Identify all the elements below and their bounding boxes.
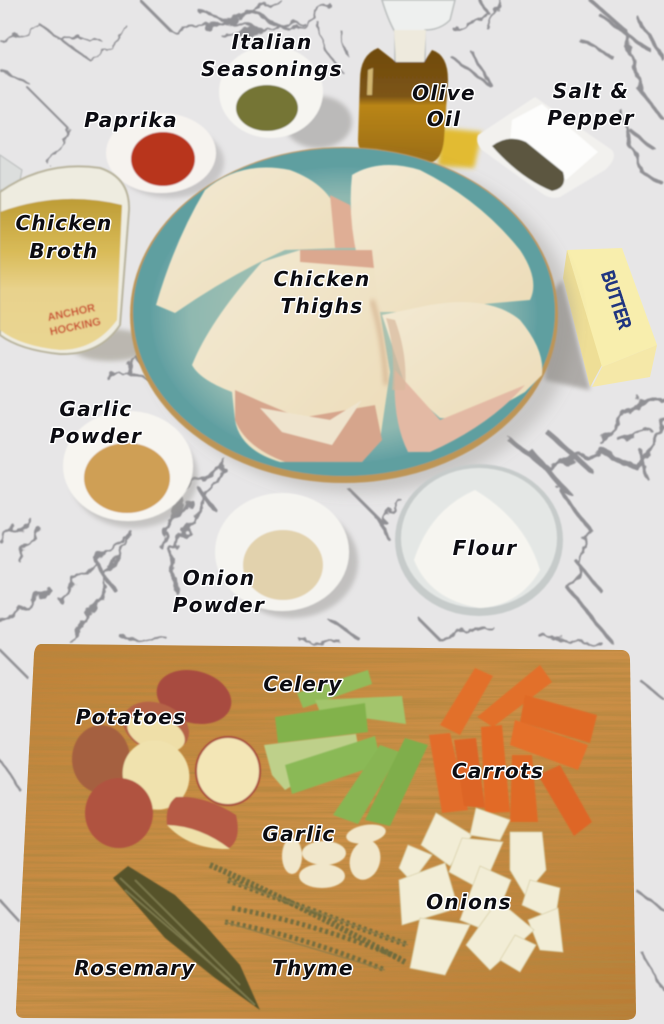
- garlic cloves: [282, 822, 387, 888]
- label: Chicken Thighs: [273, 267, 371, 318]
- measuring cup: chicken broth: [0, 155, 150, 361]
- label: Olive Oil: [412, 81, 476, 131]
- label: Celery: Celery: [263, 672, 343, 696]
- label: Italian Seasonings: Italian: [231, 30, 313, 54]
- bowl: onion powder: [215, 493, 358, 618]
- label: Onion Powder: [173, 566, 265, 617]
- label: Chicken Thighs: Chicken: [273, 267, 371, 291]
- label: Chicken Broth: Broth: [29, 239, 99, 263]
- label: Italian Seasonings: Seasonings: [201, 57, 343, 81]
- thyme: [210, 865, 408, 970]
- plate: [130, 147, 574, 493]
- bottle: olive oil: [358, 0, 482, 168]
- bowl: paprika: [106, 113, 224, 198]
- label: Salt and Pepper: [547, 79, 635, 130]
- label: Italian Seasonings: [201, 30, 343, 81]
- label: Onion Powder: Onion: [183, 566, 255, 590]
- label: Garlic Powder: [50, 397, 142, 448]
- celery: [264, 670, 428, 826]
- wooden cutting board: [16, 644, 636, 1020]
- label: Salt and Pepper: Salt &: [553, 79, 629, 103]
- potatoes: [72, 662, 260, 849]
- label: Garlic: Garlic: [262, 822, 336, 846]
- glass bowl: flour: [395, 464, 563, 616]
- measuring cup: chicken broth: HOCKING: [49, 316, 102, 338]
- label: Carrots: Carrots: [452, 759, 544, 783]
- label: Chicken Broth: Chicken: [15, 211, 113, 235]
- butter: [545, 248, 657, 390]
- label: Chicken Thighs: Thighs: [280, 294, 364, 318]
- label: Rosemary: Rosemary: [74, 956, 196, 980]
- label: Potatoes: Potatoes: [76, 705, 186, 729]
- label: Garlic Powder: Powder: [50, 424, 142, 448]
- label: Chicken Broth: [15, 211, 113, 263]
- chicken thighs: [156, 165, 542, 462]
- label: Onion Powder: Powder: [173, 593, 265, 617]
- bowl: Italian seasonings: [219, 46, 352, 148]
- label: Flour: Flour: [453, 536, 517, 560]
- label: Paprika: Paprika: [84, 108, 178, 132]
- onions: [399, 808, 563, 975]
- butter: BUTTER: [596, 268, 635, 332]
- label: Thyme: Thyme: [272, 956, 354, 980]
- label: Salt and Pepper: Pepper: [547, 106, 635, 130]
- label: Olive Oil: Oil: [427, 107, 461, 131]
- carrots: [429, 665, 597, 836]
- label: Olive Oil: Olive: [412, 81, 476, 105]
- rosemary: [113, 866, 260, 1010]
- dish: salt and pepper: [477, 97, 614, 198]
- bowl: garlic powder: [63, 411, 198, 528]
- label: Onions: Onions: [426, 890, 512, 914]
- label: Garlic Powder: Garlic: [59, 397, 133, 421]
- measuring cup: chicken broth: ANCHOR: [47, 302, 96, 324]
